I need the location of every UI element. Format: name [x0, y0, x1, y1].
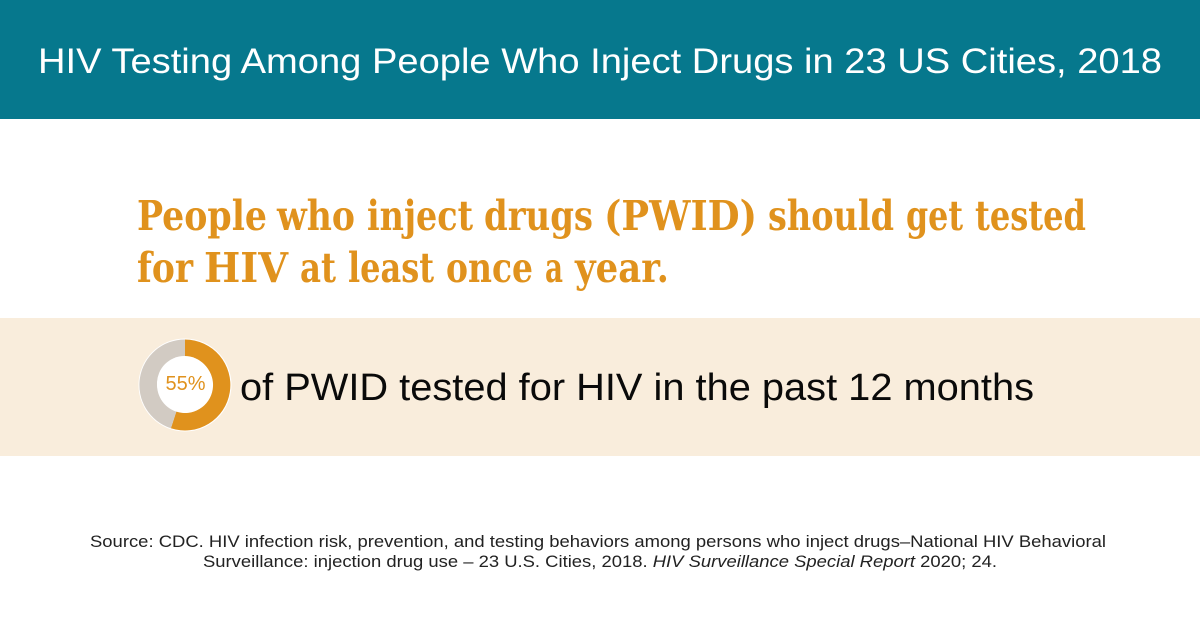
main recommendation heading: (PWID) — [604, 192, 757, 240]
donut value label: 55% — [166, 373, 206, 395]
main recommendation heading: HIV — [204, 244, 289, 292]
source citation: Source: CDC. HIV infection risk, prevention, and testing behaviors among persons who inject drugs–National HIV Behavioral — [90, 532, 1106, 551]
main recommendation heading: at — [300, 244, 336, 292]
panel: statistic band — [0, 318, 1200, 456]
main recommendation heading: inject — [367, 192, 473, 240]
main recommendation heading: drugs — [484, 192, 593, 240]
header banner — [0, 0, 1200, 119]
source citation: Surveillance: injection drug use – 23 U.S. Cities, 2018. HIV Surveillance Special Report 2020; 24. — [203, 552, 997, 571]
main recommendation heading: tested — [975, 192, 1086, 240]
main recommendation heading: for — [137, 244, 194, 292]
source citation — [90, 532, 1106, 571]
main recommendation heading: who — [276, 192, 355, 240]
title: HIV Testing Among People Who Inject Drugs in 23 US Cities, 2018 — [38, 41, 1162, 81]
main recommendation heading: People — [137, 192, 267, 240]
main recommendation heading: least — [348, 244, 434, 292]
main recommendation heading: once — [446, 244, 533, 292]
main recommendation heading: year. — [574, 244, 669, 292]
main recommendation heading — [137, 192, 1086, 292]
main recommendation heading: a — [545, 244, 563, 292]
main recommendation heading: get — [906, 192, 963, 240]
main recommendation heading: should — [768, 192, 894, 240]
statistic description: of PWID tested for HIV in the past 12 months — [240, 367, 1034, 409]
donut chart: 55 percent — [138, 338, 232, 432]
